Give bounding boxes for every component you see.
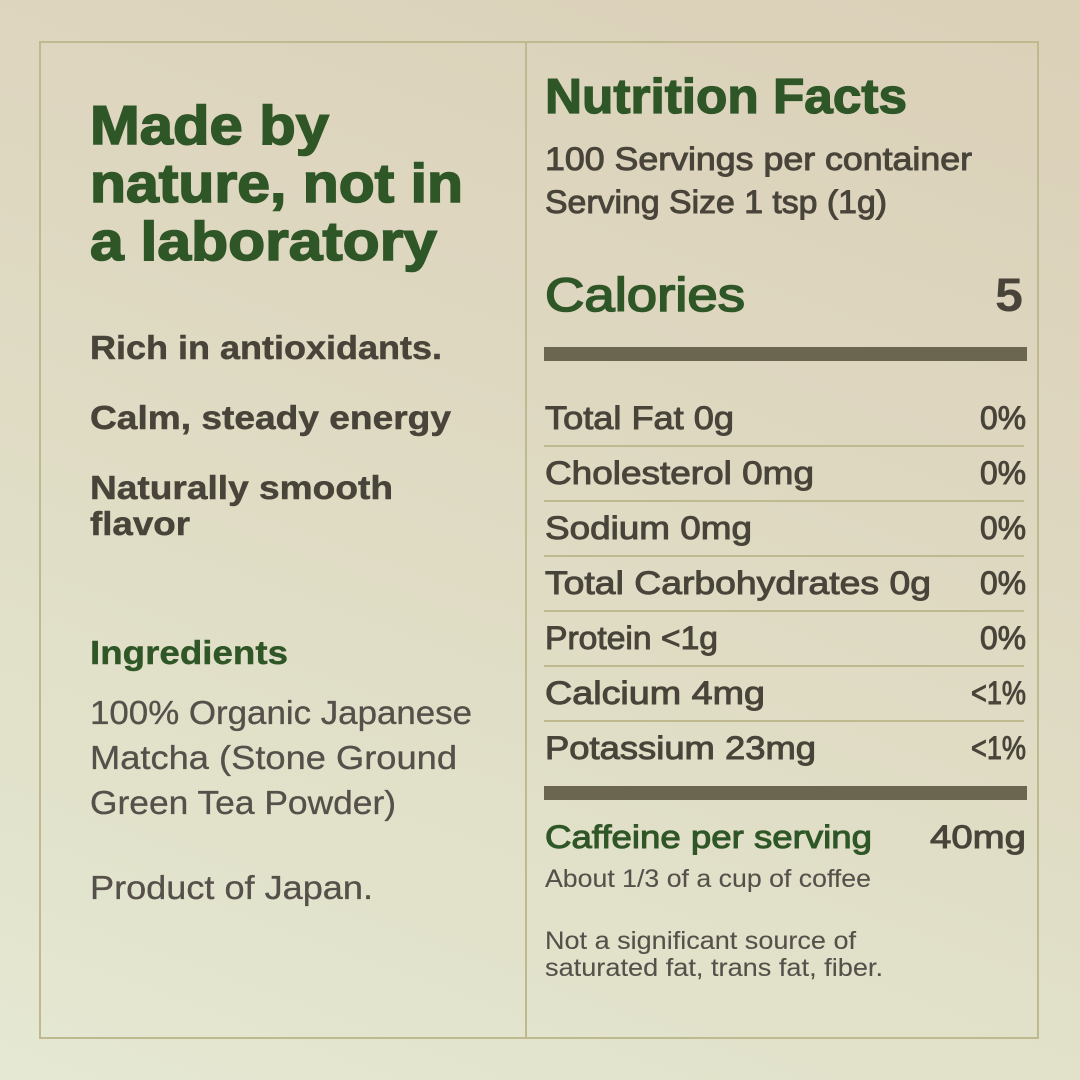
row: total fat (545, 400, 1026, 436)
nutrition heading: Nutrition Facts (545, 70, 907, 124)
row: calcium: <1% (971, 675, 1026, 711)
caffeine row: 40mg (930, 819, 1026, 855)
caffeine note: About 1/3 of a cup of coffee (545, 865, 871, 893)
benefit: energy: Calm, steady energy (90, 399, 452, 436)
caffeine row (545, 819, 1026, 855)
row: potassium (545, 730, 1026, 766)
serving info: Serving Size 1 tsp (1g) (545, 184, 887, 220)
row: protein (545, 620, 1026, 656)
row: total carbohydrates (545, 565, 1026, 601)
row dividers (544, 446, 1024, 721)
calories row: Calories (545, 268, 745, 321)
footnote: Not a significant source of (545, 927, 856, 955)
thick rule bottom (544, 786, 1027, 800)
benefit: flavor (90, 469, 393, 542)
benefit: flavor: flavor (90, 505, 190, 542)
calories row (545, 268, 1023, 321)
row: total fat: 0% (980, 400, 1026, 436)
row: calcium (545, 675, 1026, 711)
footnote (545, 927, 883, 982)
row: protein: 0% (980, 620, 1026, 656)
row: potassium: Potassium 23mg (545, 730, 816, 766)
ingredients heading: Ingredients (90, 634, 288, 671)
serving info: 100 Servings per container (545, 141, 972, 177)
panel: nutrition facts (544, 70, 1027, 982)
ingredients text: Green Tea Powder) (90, 784, 396, 821)
row: cholesterol: 0% (980, 455, 1026, 491)
row: calcium: Calcium 4mg (545, 675, 765, 711)
row: potassium: <1% (971, 730, 1026, 766)
row: sodium (545, 510, 1026, 546)
row: sodium: 0% (980, 510, 1026, 546)
row: cholesterol: Cholesterol 0mg (545, 455, 814, 491)
panel: left column (90, 94, 472, 906)
heading: made by nature: Made by (90, 94, 329, 156)
caffeine row: Caffeine per serving (545, 819, 872, 855)
row: total fat: Total Fat 0g (545, 400, 734, 436)
calories row: 5 (995, 268, 1023, 321)
row: total carbohydrates: Total Carbohydrates 0g (545, 565, 931, 601)
ingredients text: 100% Organic Japanese (90, 694, 472, 731)
ingredients text: Matcha (Stone Ground (90, 739, 457, 776)
row: total carbohydrates: 0% (980, 565, 1026, 601)
ingredients text (90, 694, 472, 821)
benefit: antioxidants: Rich in antioxidants. (90, 329, 442, 366)
heading: made by nature (90, 94, 463, 272)
thick rule top (544, 347, 1027, 361)
heading: made by nature: a laboratory (90, 210, 437, 272)
benefit: flavor: Naturally smooth (90, 469, 393, 506)
footnote: saturated fat, trans fat, fiber. (545, 954, 883, 982)
heading: made by nature: nature, not in (90, 152, 463, 214)
row: protein: Protein <1g (545, 620, 718, 656)
row: cholesterol (545, 455, 1026, 491)
origin text: Product of Japan. (90, 869, 373, 906)
serving info (545, 141, 972, 220)
row: sodium: Sodium 0mg (545, 510, 752, 546)
